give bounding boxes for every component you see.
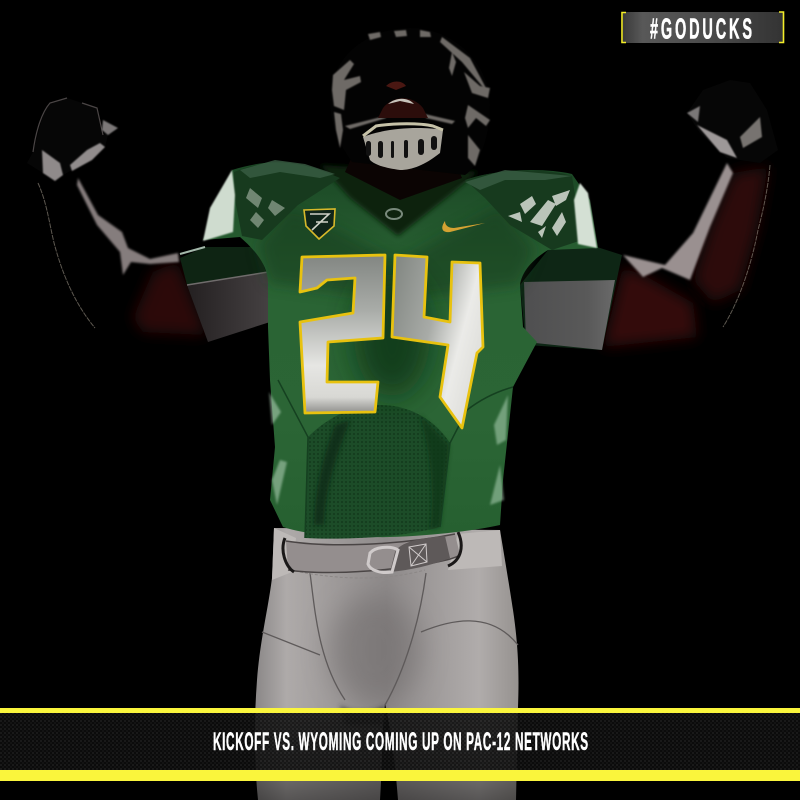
nike swoosh	[442, 221, 485, 232]
left sleeve	[180, 247, 270, 342]
neck and collar shadow	[320, 165, 478, 236]
bracket right	[779, 12, 784, 42]
neck	[345, 150, 462, 200]
cage fragments	[332, 30, 490, 166]
jersey torso	[203, 150, 598, 539]
number 2	[300, 255, 385, 413]
hashtag text: #GODUCKS	[650, 12, 752, 45]
hashtag badge	[622, 12, 784, 45]
right sleeve	[520, 247, 622, 350]
bottom yellow line	[0, 770, 800, 781]
seams	[278, 380, 513, 538]
right arm	[603, 163, 770, 347]
pants	[252, 528, 522, 800]
left arm	[38, 178, 207, 335]
top yellow line	[0, 708, 800, 713]
left shoulder feathers	[203, 160, 340, 241]
bracket left	[622, 12, 626, 42]
pants seams	[262, 573, 518, 705]
belt	[286, 534, 460, 572]
jersey collar logo	[386, 209, 402, 219]
chest shadow	[354, 273, 430, 397]
badge background	[623, 12, 784, 43]
banner dark band	[0, 713, 800, 770]
bottom banner	[0, 708, 800, 781]
number 4	[392, 255, 483, 428]
left fist	[27, 98, 118, 181]
pac-12 shield	[304, 209, 335, 239]
right fist	[687, 80, 778, 163]
side highlights	[269, 392, 287, 505]
mesh panel	[305, 405, 450, 539]
helmet	[330, 28, 490, 175]
banner text: KICKOFF VS. WYOMING COMING UP ON PAC-12 NETWORKS	[213, 728, 588, 756]
right shoulder feathers	[465, 170, 597, 250]
chin strap	[363, 128, 443, 170]
